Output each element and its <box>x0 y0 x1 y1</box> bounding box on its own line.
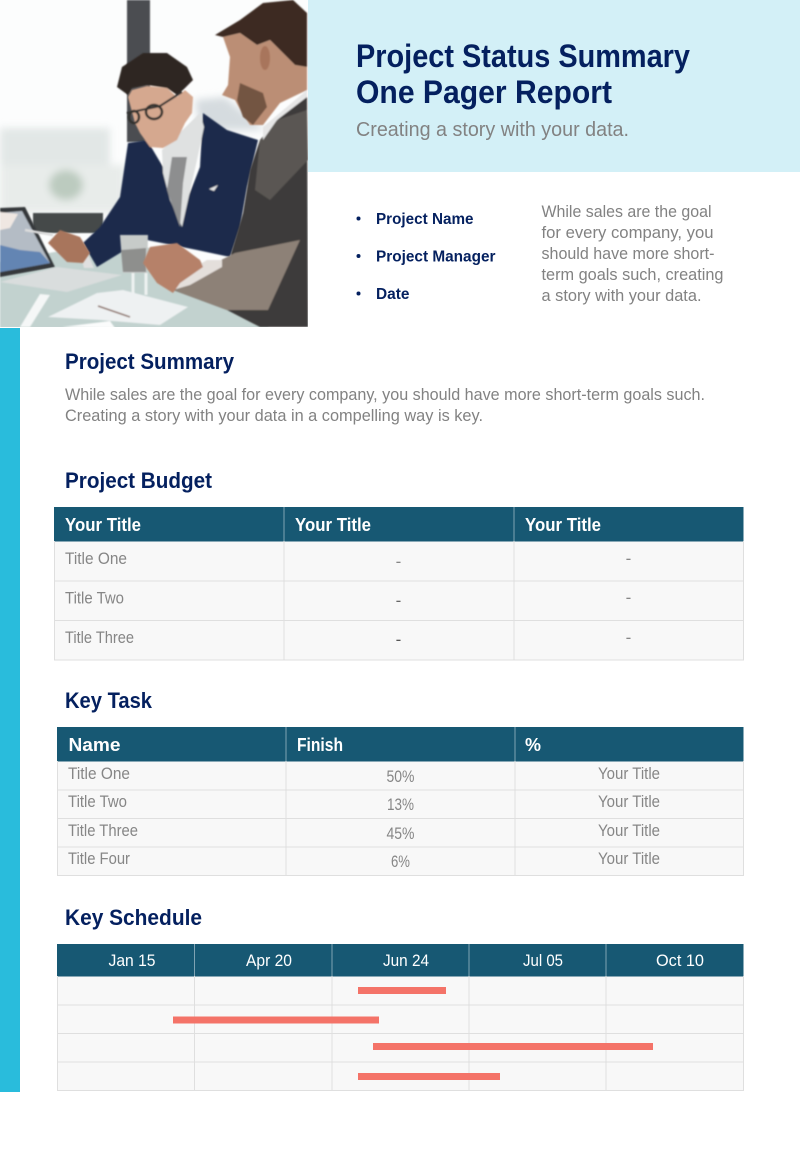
key task percentages: 13% <box>387 795 414 814</box>
key task header labels: Name <box>68 735 120 755</box>
budget header labels: Your Title <box>65 515 141 535</box>
budget values: - <box>396 630 401 649</box>
gantt date labels: Jun 24 <box>383 952 429 970</box>
key task values <box>598 764 660 868</box>
header panel <box>308 0 800 172</box>
list item: project name: Project Name <box>376 211 474 228</box>
photo: window frame <box>127 0 150 142</box>
budget header labels <box>65 515 601 535</box>
photo: pointing hand and pen <box>25 230 90 263</box>
budget row labels <box>65 549 134 647</box>
budget values <box>396 549 631 649</box>
budget values: - <box>396 552 401 571</box>
photo: two businessmen reviewing a laptop <box>0 0 308 328</box>
list item: date: Date <box>376 286 410 303</box>
key task values: Your Title <box>598 764 660 783</box>
intro paragraph: While sales are the goal <box>542 203 712 221</box>
gantt date labels: Apr 20 <box>246 952 292 970</box>
project summary text <box>65 386 705 425</box>
key task percentages: 50% <box>386 767 414 786</box>
photo: foreground man <box>143 0 308 327</box>
key task values: Your Title <box>598 792 660 811</box>
key task values: Your Title <box>598 849 660 868</box>
gantt date labels: Oct 10 <box>656 952 704 970</box>
intro paragraph: should have more short- <box>542 245 714 263</box>
intro paragraph <box>542 203 724 305</box>
budget header labels: Your Title <box>295 515 371 535</box>
budget values: - <box>626 549 631 568</box>
table: key task <box>57 727 744 876</box>
intro paragraph: term goals such, creating <box>542 266 724 284</box>
title: One Pager Report <box>356 74 612 110</box>
key task names <box>68 764 138 868</box>
title <box>356 38 690 110</box>
project details list <box>356 211 496 303</box>
intro paragraph: a story with your data. <box>542 287 702 305</box>
photo: blurred buildings <box>0 97 265 213</box>
budget row labels: Title Two <box>65 588 124 608</box>
budget header labels: Your Title <box>525 515 601 535</box>
title: Project Status Summary <box>356 38 690 74</box>
photo: laptop <box>0 207 122 292</box>
key task names: Title Two <box>68 792 127 811</box>
key task percentages: 6% <box>391 852 410 871</box>
gantt date labels: Jul 05 <box>523 952 563 970</box>
heading: key task: Key Task <box>65 688 153 713</box>
key task percentages <box>386 767 414 871</box>
budget values: - <box>626 628 631 647</box>
project summary text: Creating a story with your data in a compelling way is key. <box>65 407 483 425</box>
budget values: - <box>626 588 631 607</box>
intro paragraph: for every company, you <box>542 224 714 242</box>
gantt date labels <box>108 952 704 970</box>
subtitle: Creating a story with your data. <box>356 119 629 141</box>
gantt date labels: Jan 15 <box>108 952 156 970</box>
photo: papers <box>20 290 188 328</box>
key task header labels: % <box>525 735 541 755</box>
photo: seated man <box>78 53 258 268</box>
budget values: - <box>396 591 401 610</box>
gantt chart: key schedule <box>57 944 744 1090</box>
key task header labels: Finish <box>297 735 343 755</box>
heading: project summary: Project Summary <box>65 349 235 374</box>
sidebar accent <box>0 328 20 1092</box>
key task header labels <box>68 735 541 755</box>
key task values: Your Title <box>598 821 660 840</box>
table: project budget <box>54 507 744 660</box>
gantt bars <box>173 987 653 1080</box>
key task names: Title Four <box>68 849 130 868</box>
photo: table <box>0 240 270 328</box>
heading: project budget: Project Budget <box>65 468 213 493</box>
heading: key schedule: Key Schedule <box>65 905 202 930</box>
key task names: Title One <box>68 764 130 783</box>
budget row labels: Title One <box>65 549 127 568</box>
list item: project manager: Project Manager <box>376 248 496 266</box>
photo: glass <box>120 235 148 295</box>
project summary text: While sales are the goal for every company, you should have more short-term goals such. <box>65 386 705 404</box>
budget row labels: Title Three <box>65 628 134 647</box>
key task percentages: 45% <box>386 824 414 843</box>
key task names: Title Three <box>68 821 138 840</box>
